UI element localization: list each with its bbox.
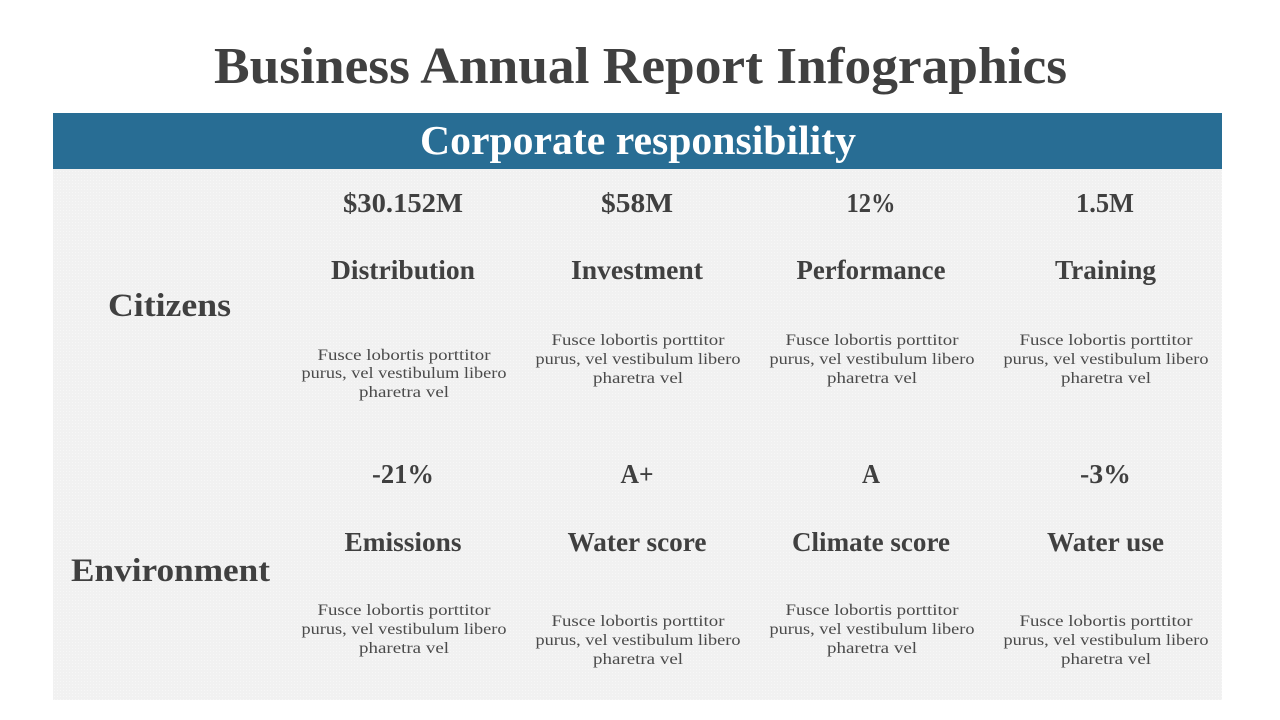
metric: water score <box>536 459 740 668</box>
panel: content background <box>53 169 1222 700</box>
metric: climate score: A <box>862 459 880 489</box>
banner: corporate responsibility: Corporate responsibility <box>420 117 856 163</box>
row label: citizens: Citizens <box>108 288 231 324</box>
metric: distribution: purus, vel vestibulum libero <box>302 365 506 382</box>
metric: performance: purus, vel vestibulum libero <box>770 351 974 368</box>
metric: water use: Water use <box>1047 527 1164 557</box>
metric: training <box>1004 188 1208 387</box>
metric: training: purus, vel vestibulum libero <box>1004 351 1208 368</box>
metric: water use <box>1004 459 1208 668</box>
metric: investment <box>536 188 740 387</box>
metric: investment: $58M <box>601 188 673 218</box>
metric: investment: pharetra vel <box>593 370 684 387</box>
metric: emissions: pharetra vel <box>359 640 450 657</box>
title: Business Annual Report Infographics <box>214 38 1067 95</box>
metric: performance: Fusce lobortis porttitor <box>786 332 959 349</box>
metric: performance <box>770 188 974 387</box>
metric: investment: Fusce lobortis porttitor <box>552 332 725 349</box>
metric: water use: pharetra vel <box>1061 651 1152 668</box>
metric: distribution: $30.152M <box>343 188 463 218</box>
metric: water score: purus, vel vestibulum libero <box>536 632 740 649</box>
metric: water use: purus, vel vestibulum libero <box>1004 632 1208 649</box>
metric: distribution: pharetra vel <box>359 384 450 401</box>
metric: climate score: Fusce lobortis porttitor <box>786 602 959 619</box>
metric: water score: Water score <box>568 527 707 557</box>
metric: emissions: Fusce lobortis porttitor <box>318 602 491 619</box>
metric: climate score <box>770 459 974 657</box>
metric: distribution <box>302 188 506 401</box>
metric: climate score: pharetra vel <box>827 640 918 657</box>
metric: emissions: -21% <box>372 459 434 489</box>
metric: training: 1.5M <box>1076 188 1134 218</box>
row label: environment: Environment <box>71 553 270 589</box>
metric: performance: 12% <box>846 188 896 218</box>
metric: climate score: purus, vel vestibulum libero <box>770 621 974 638</box>
metric: emissions: Emissions <box>344 527 462 557</box>
metric: investment: Investment <box>571 255 703 285</box>
metric: water score: A+ <box>620 459 654 489</box>
metric: performance: pharetra vel <box>827 370 918 387</box>
metric: training: pharetra vel <box>1061 370 1152 387</box>
metric: investment: purus, vel vestibulum libero <box>536 351 740 368</box>
metric: water use: Fusce lobortis porttitor <box>1020 613 1193 630</box>
metric: training: Training <box>1055 255 1156 285</box>
metric: distribution: Fusce lobortis porttitor <box>318 347 491 364</box>
metric: water score: pharetra vel <box>593 651 684 668</box>
metric: climate score: Climate score <box>792 527 950 557</box>
banner: corporate responsibility <box>53 113 1222 169</box>
metric: water use: -3% <box>1080 459 1131 489</box>
metric: emissions <box>302 459 506 657</box>
metric: distribution: Distribution <box>331 255 475 285</box>
metric: performance: Performance <box>796 255 946 285</box>
metric: training: Fusce lobortis porttitor <box>1020 332 1193 349</box>
metric: emissions: purus, vel vestibulum libero <box>302 621 506 638</box>
metric: water score: Fusce lobortis porttitor <box>552 613 725 630</box>
